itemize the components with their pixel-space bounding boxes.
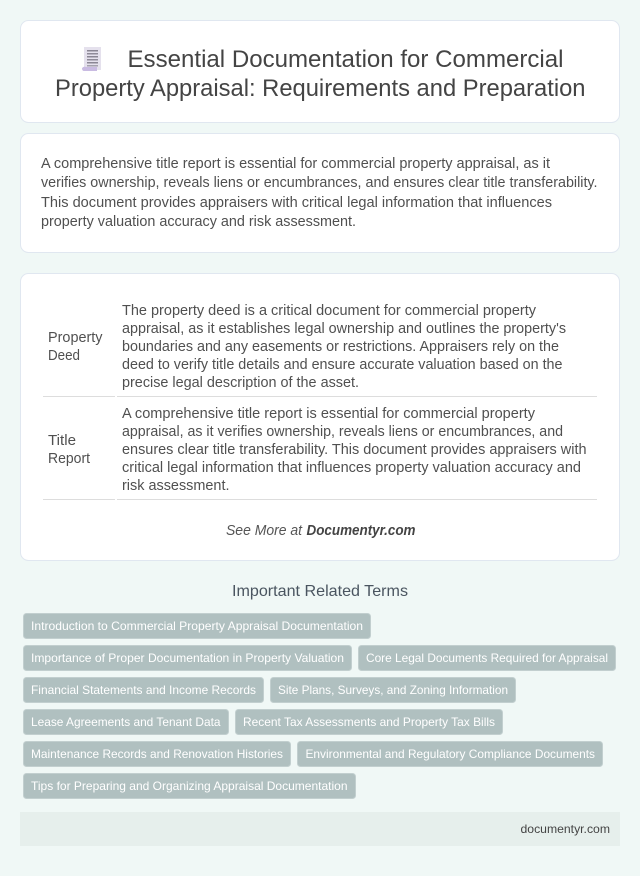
tag [24,774,356,798]
table row: property deed: precise legal description of the asset. [122,375,359,391]
table row: title report: ensures clear title transferability. This document provides appraisers with [122,442,586,458]
footer [20,812,620,846]
table row: title report: A comprehensive title report is essential for commercial property [122,406,536,422]
text block: summary: verifies ownership, reveals liens or encumbrances, and ensures clear title transferability. [41,175,598,191]
tag [24,646,352,670]
table row: title report: appraisal, as it verifies ownership, reveals liens or encumbrances, and [122,424,563,440]
table row: title report [43,406,597,500]
panel: header [20,20,620,122]
tag: Tips for Preparing and Organizing Appraisal Documentation [31,779,348,793]
heading: related terms: Important Related Terms [232,583,408,600]
title [55,46,586,102]
text block: summary: A comprehensive title report is essential for commercial property appraisal, as it [41,156,550,172]
tag [358,646,616,670]
tag: Recent Tax Assessments and Property Tax Bills [243,715,495,729]
icon: document scroll [82,47,101,71]
text block: summary: property valuation accuracy and risk assessment. [41,214,356,230]
tag [24,742,290,766]
table row: property deed: Property [48,330,103,346]
title: Essential Documentation for Commercial [128,46,564,73]
text block: summary: This document provides appraisers with critical legal information that influences [41,195,552,211]
table row: property deed: deed to verify title details and ensure accurate valuation based on the [122,357,562,373]
tag: Lease Agreements and Tenant Data [31,715,221,729]
title: Property Appraisal: Requirements and Preparation [55,75,586,102]
tag [24,614,370,638]
table row: property deed: Deed [48,348,80,364]
tag [236,710,502,734]
tag: Financial Statements and Income Records [31,683,256,697]
text block: summary [41,156,598,230]
tag [298,742,602,766]
tag list: related terms [24,614,616,798]
link: see more: See More at [226,523,303,539]
table row: title report: risk assessment. [122,478,230,494]
tag: Introduction to Commercial Property Appraisal Documentation [31,619,363,633]
table row: property deed [43,303,597,397]
tag [24,678,264,702]
tag: Maintenance Records and Renovation Histories [31,747,283,761]
tag: Core Legal Documents Required for Appraisal [366,651,608,665]
link: see more: Documentyr.com [306,523,416,539]
table row: title report: Report [48,451,90,467]
table row: property deed: appraisal, as it establishes legal ownership and outlines the property's [122,321,566,337]
panel: summary paragraph [20,134,620,252]
table row: property deed: The property deed is a critical document for commercial property [122,303,537,319]
tag: Site Plans, Surveys, and Zoning Information [278,683,508,697]
tag [24,710,228,734]
table row: title report: critical legal information that influences property valuation accuracy and [122,460,581,476]
footer: documentyr.com [520,822,610,836]
tag: Importance of Proper Documentation in Property Valuation [31,651,344,665]
table row: title report: Title [48,433,76,449]
panel: document table [20,274,620,560]
table row: property deed: boundaries and any easements or restrictions. Appraisers rely on the [122,339,559,355]
link: see more [226,523,416,539]
tag [270,678,516,702]
tag: Environmental and Regulatory Compliance Documents [306,747,595,761]
